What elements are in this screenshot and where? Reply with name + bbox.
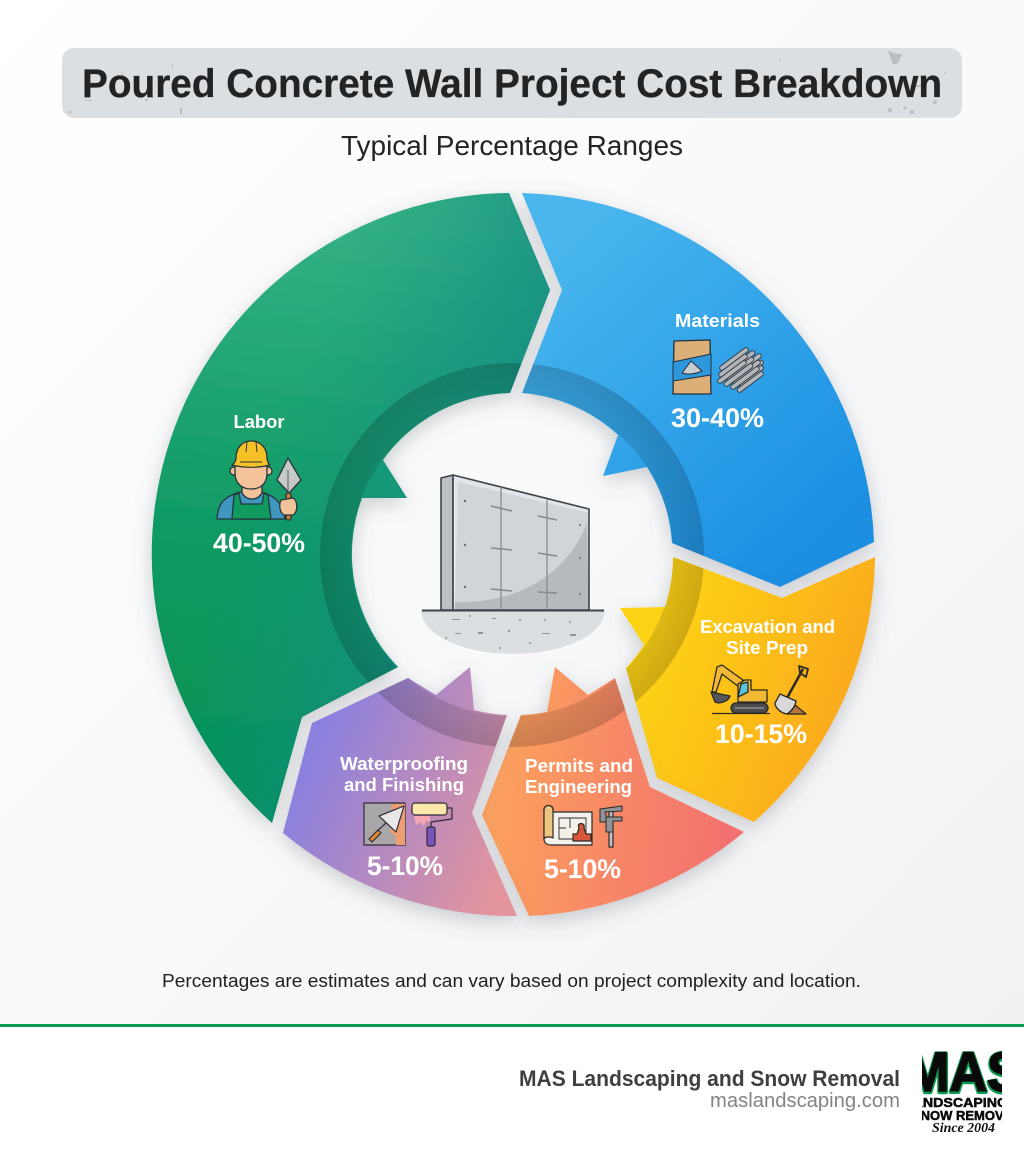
footnote: Percentages are estimates and can vary based on project complexity and location.: [162, 971, 861, 991]
label: materials: Materials: [675, 310, 760, 331]
donut chart: cost breakdown: [152, 193, 875, 916]
label: excavation and site prep: Site Prep: [726, 637, 808, 658]
subtitle: Typical Percentage Ranges: [341, 130, 683, 161]
segment: waterproofing and finishing: [276, 667, 520, 931]
label: excavation and site prep: [700, 616, 835, 658]
ground base: [421, 611, 605, 654]
wall front face: [453, 475, 589, 610]
logo: [922, 1050, 1002, 1132]
label: waterproofing and finishing: and Finishing: [344, 774, 464, 795]
icon: construction worker with trowel: [217, 441, 301, 520]
label: permits and engineering: Permits and: [525, 755, 633, 776]
title text: Poured Concrete Wall Project Cost Breakdown: [82, 62, 942, 106]
company name: MAS Landscaping and Snow Removal: [519, 1066, 900, 1091]
label: permits and engineering: [525, 755, 633, 797]
logo: SNOW REMOVAL: [912, 1108, 1020, 1123]
value: permits and engineering: 5-10%: [544, 854, 621, 884]
icon: blueprint stamp and caliper: [544, 806, 622, 847]
label: permits and engineering: Engineering: [525, 776, 632, 797]
segment: permits and engineering: [477, 667, 744, 930]
website: maslandscaping.com: [710, 1090, 900, 1112]
logo: Since 2004: [932, 1121, 995, 1136]
title bar: [62, 48, 962, 118]
segment: excavation and site prep: [618, 557, 884, 833]
label: labor: Labor: [234, 411, 284, 432]
label: excavation and site prep: Excavation and: [700, 616, 835, 637]
value: materials: 30-40%: [671, 403, 764, 433]
icon: cement bag and rebar bundle: [673, 340, 761, 394]
footer: [0, 1024, 1024, 1132]
value: waterproofing and finishing: 5-10%: [367, 851, 443, 881]
label: waterproofing and finishing: [340, 753, 468, 795]
value: labor: 40-50%: [213, 528, 305, 558]
center illustration: concrete wall: [421, 475, 605, 654]
ground line: [422, 610, 604, 612]
segment: labor: [142, 190, 556, 830]
wall side face: [441, 475, 453, 610]
icon: excavator and shovel: [711, 665, 808, 714]
icon: trowel on wall and paint roller: [364, 803, 452, 846]
value: excavation and site prep: 10-15%: [715, 719, 807, 749]
segment: materials: [518, 191, 882, 598]
logo: LANDSCAPING: [904, 1095, 1008, 1110]
label: waterproofing and finishing: Waterproofing: [340, 753, 468, 774]
